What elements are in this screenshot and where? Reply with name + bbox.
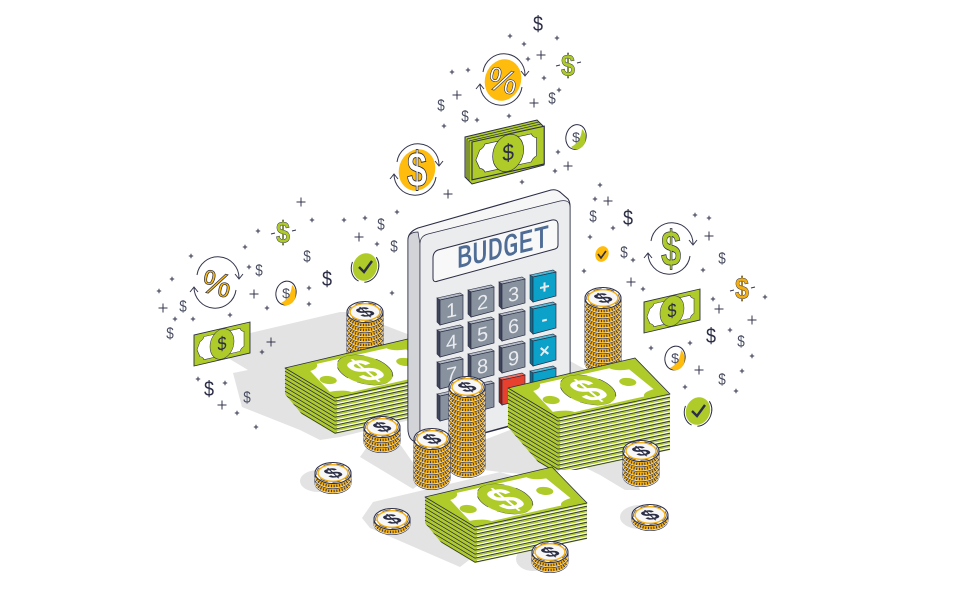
decorative dollar signs: $ bbox=[377, 216, 385, 234]
display bbox=[433, 220, 558, 282]
decorative dollar signs: $ bbox=[303, 248, 311, 266]
icon: orange dollar, right: $ bbox=[735, 270, 749, 306]
keypad: 2 bbox=[477, 291, 488, 315]
icon: check, right bbox=[680, 392, 716, 430]
icon: green dollar, top right bbox=[556, 48, 581, 82]
icon: small check, right bbox=[593, 244, 611, 264]
coin stack behind left bills bbox=[347, 302, 383, 368]
icon: dollar with arrows, orange bbox=[390, 143, 443, 198]
keypad: × bbox=[539, 340, 550, 362]
decorative dollar signs: $ bbox=[620, 244, 628, 262]
decorative dollar signs: $ bbox=[461, 108, 469, 126]
icon: half coin, left bbox=[273, 279, 299, 307]
decorative dollar signs: $ bbox=[718, 372, 726, 388]
decorative dollar signs: $ bbox=[623, 207, 633, 230]
icon: orange dollar, right bbox=[730, 270, 755, 306]
icon: green dollar, left bbox=[271, 214, 296, 250]
decorative dollar signs: $ bbox=[390, 238, 398, 256]
icon: half coin, right bbox=[662, 344, 688, 372]
decorative dollar signs: $ bbox=[533, 13, 543, 36]
decorative dollar signs: $ bbox=[548, 90, 556, 108]
keypad: 9 bbox=[508, 347, 519, 371]
two coins, front bbox=[532, 542, 568, 572]
coins, left bbox=[315, 462, 351, 494]
decorative dollar signs: $ bbox=[737, 334, 745, 350]
icon: green bill, left bbox=[194, 322, 250, 366]
icon: check, left bbox=[347, 248, 383, 286]
icon: stack of flat bills, top bbox=[465, 120, 544, 184]
decorative dollar signs: $ bbox=[166, 326, 174, 342]
keypad: 6 bbox=[508, 315, 519, 339]
keypad: 7 bbox=[446, 363, 457, 387]
keypad: 8 bbox=[477, 355, 488, 379]
calculator body bbox=[408, 190, 570, 449]
infographic: budget calculator with money bbox=[156, 15, 768, 573]
icon: percent with arrows, top bbox=[476, 54, 529, 106]
bill stack, left bbox=[284, 338, 408, 434]
icon: half coin, right: $ bbox=[671, 350, 679, 366]
keypad: 4 bbox=[446, 331, 457, 355]
decorative dollar signs: $ bbox=[322, 268, 332, 291]
calculator face bbox=[420, 201, 570, 448]
decorative dollar signs: $ bbox=[706, 325, 716, 348]
icon: green dollar, left: $ bbox=[276, 214, 290, 250]
icon: green dollar, top right: $ bbox=[561, 48, 575, 82]
keypad: 1 bbox=[446, 299, 457, 323]
decorative dollar signs: $ bbox=[718, 250, 726, 268]
icon: small coin, top right bbox=[563, 122, 589, 152]
bill stack, right bbox=[508, 358, 670, 474]
icon: dollar with arrows, orange: $ bbox=[407, 143, 427, 198]
icon: percent with arrows, left: % bbox=[198, 262, 236, 305]
icon: green bill, right bbox=[644, 289, 700, 333]
decorative plus marks bbox=[157, 34, 767, 429]
single coin, front right bbox=[632, 504, 668, 530]
coin stack behind right bills bbox=[585, 288, 621, 374]
coin stack, right of bills bbox=[623, 440, 659, 486]
decorative dollar signs: $ bbox=[255, 262, 263, 280]
icon: percent with arrows, left bbox=[190, 257, 243, 308]
icon: half coin, left: $ bbox=[282, 285, 290, 301]
icon: green dollar with arrows, right bbox=[644, 222, 697, 277]
single coin, front left bbox=[374, 508, 410, 534]
display text: BUDGET bbox=[457, 220, 549, 278]
tall coin stack, centre bbox=[449, 376, 485, 478]
calculator bbox=[408, 190, 570, 449]
decorative dollar signs: $ bbox=[243, 390, 251, 406]
decorative dollar signs: $ bbox=[179, 298, 187, 316]
icon: small coin, top right: $ bbox=[572, 129, 580, 145]
bill stack, front bbox=[425, 467, 587, 563]
decorative dollar signs bbox=[166, 13, 745, 406]
keypad: - bbox=[542, 309, 547, 330]
coin stack, centre left bbox=[414, 428, 450, 490]
keypad: 3 bbox=[508, 283, 519, 307]
keypad: 5 bbox=[477, 323, 488, 347]
keypad bbox=[437, 270, 556, 421]
icon: percent with arrows, top: % bbox=[484, 59, 522, 102]
decorative dollar signs: $ bbox=[437, 98, 445, 114]
decorative dollar signs: $ bbox=[589, 208, 597, 226]
floor shadows bbox=[228, 312, 660, 571]
short coin stack, front of left bills bbox=[364, 416, 400, 452]
decorative dollar signs: $ bbox=[204, 378, 214, 401]
icon: green dollar with arrows, right: $ bbox=[661, 222, 681, 277]
keypad: + bbox=[539, 276, 550, 298]
